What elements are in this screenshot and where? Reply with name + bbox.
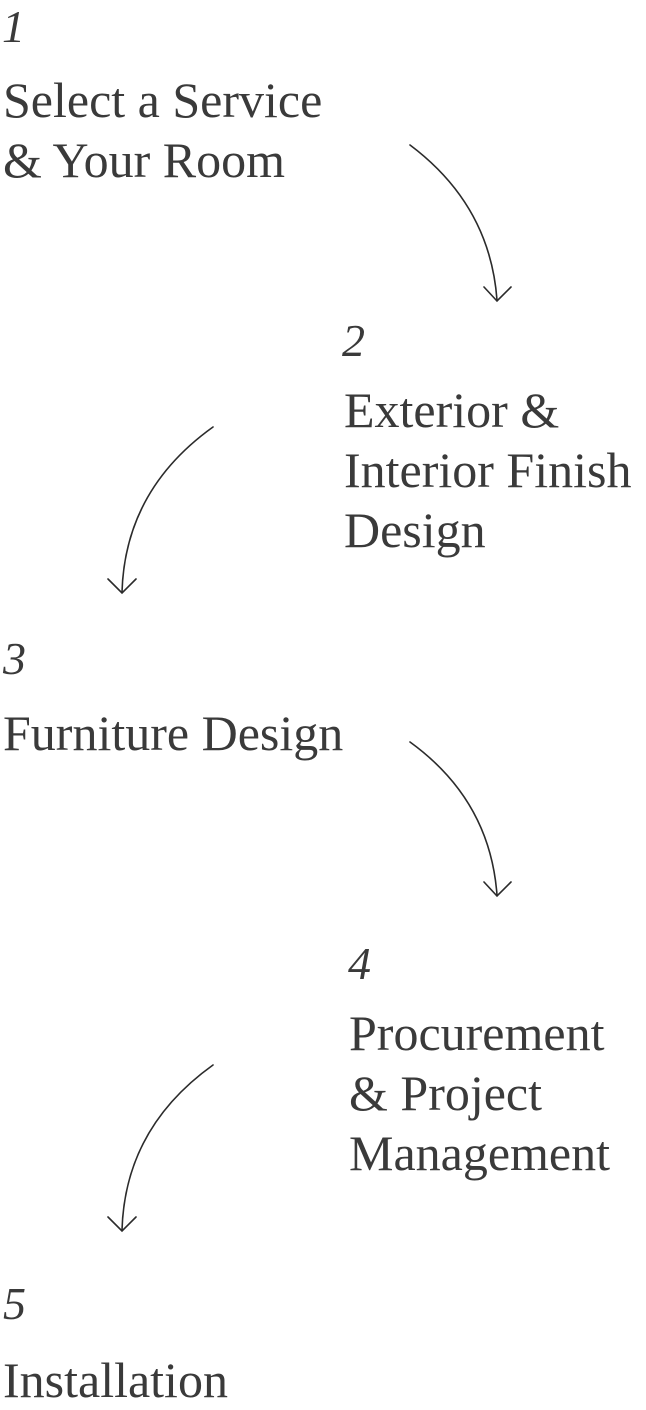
number 5: 5 bbox=[3, 1278, 26, 1329]
number 3: 3 bbox=[3, 633, 26, 684]
number 1: 1 bbox=[2, 1, 25, 52]
number 2: 2 bbox=[342, 315, 365, 366]
step 2 heading: Exterior & bbox=[344, 382, 559, 438]
step 1 heading bbox=[3, 72, 322, 188]
step 3 heading: Furniture Design bbox=[3, 705, 343, 761]
step 4 heading: Procurement bbox=[349, 1005, 604, 1061]
step 4 heading bbox=[349, 1005, 610, 1181]
step 1 heading: Select a Service bbox=[3, 72, 322, 128]
step 4 heading: & Project bbox=[349, 1065, 542, 1121]
number 4: 4 bbox=[348, 938, 371, 989]
step 1 heading: & Your Room bbox=[3, 132, 285, 188]
step 5 heading: Installation bbox=[3, 1352, 228, 1408]
arrow 1 to 2 bbox=[410, 145, 511, 301]
step 2 heading bbox=[344, 382, 631, 558]
arrow 2 to 3 bbox=[108, 427, 213, 593]
step 4 heading: Management bbox=[349, 1125, 610, 1181]
step 2 heading: Design bbox=[344, 502, 486, 558]
step 2 heading: Interior Finish bbox=[344, 442, 631, 498]
arrow 3 to 4 bbox=[410, 742, 511, 896]
arrow 4 to 5 bbox=[108, 1065, 213, 1231]
